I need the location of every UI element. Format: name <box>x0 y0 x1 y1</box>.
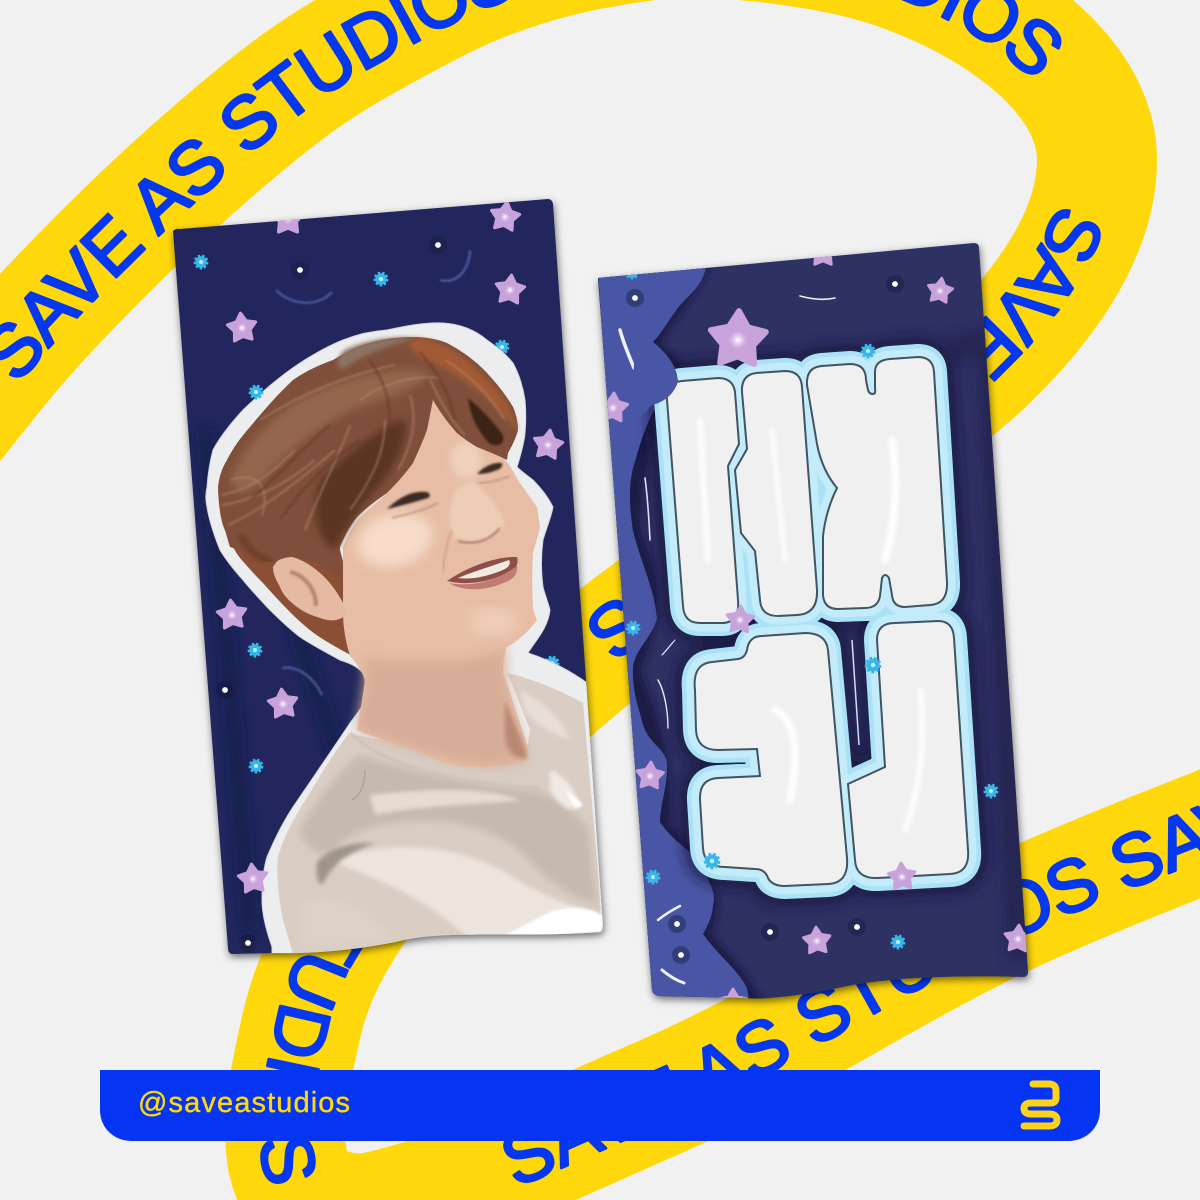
letter frame <box>667 357 968 886</box>
white dots <box>216 236 447 952</box>
ribbon text: middle STUDIOS: STUDIOS <box>588 600 626 656</box>
stars <box>598 239 1032 1014</box>
slit highlight <box>852 640 859 745</box>
frame highlight line <box>667 357 968 886</box>
portrait: shirt <box>277 673 610 960</box>
star over sticker edge <box>237 863 268 893</box>
portrait: hair <box>218 337 518 580</box>
icon: brand logo <box>1024 1084 1057 1126</box>
footer bar <box>100 1070 1100 1141</box>
portrait: face shading <box>352 442 527 765</box>
portrait: eyes <box>387 463 510 518</box>
band highlights <box>620 296 835 983</box>
spark over sticker edge <box>250 386 262 398</box>
white dots <box>626 275 904 964</box>
panel: left towel with portrait <box>160 190 620 970</box>
stars <box>216 200 564 718</box>
ribbon text: right side SAVE: SAVE <box>984 209 1101 382</box>
portrait: back hair <box>218 490 350 654</box>
portrait: ear <box>273 557 347 620</box>
blue spark icons <box>626 266 997 948</box>
portrait sticker outline <box>206 323 610 960</box>
blue wavy side band <box>598 262 750 1005</box>
frame dark halo <box>667 357 968 886</box>
letter cells <box>667 357 968 886</box>
letter gloss highlights <box>700 420 922 830</box>
dark halo around right area <box>950 340 1020 960</box>
blue band lobe over frame <box>634 342 678 416</box>
ribbon text: lower left descending: STUDIOS <box>260 948 363 1184</box>
panel: right towel with lettering <box>590 235 1040 1015</box>
portrait: smile <box>447 557 518 589</box>
blue wavy side band shadow <box>590 250 765 1010</box>
handle text: @saveastudios <box>138 1087 350 1119</box>
blue spark icons <box>195 256 558 772</box>
portrait: neck and face <box>343 400 540 767</box>
portrait: shirt shading <box>300 690 602 945</box>
